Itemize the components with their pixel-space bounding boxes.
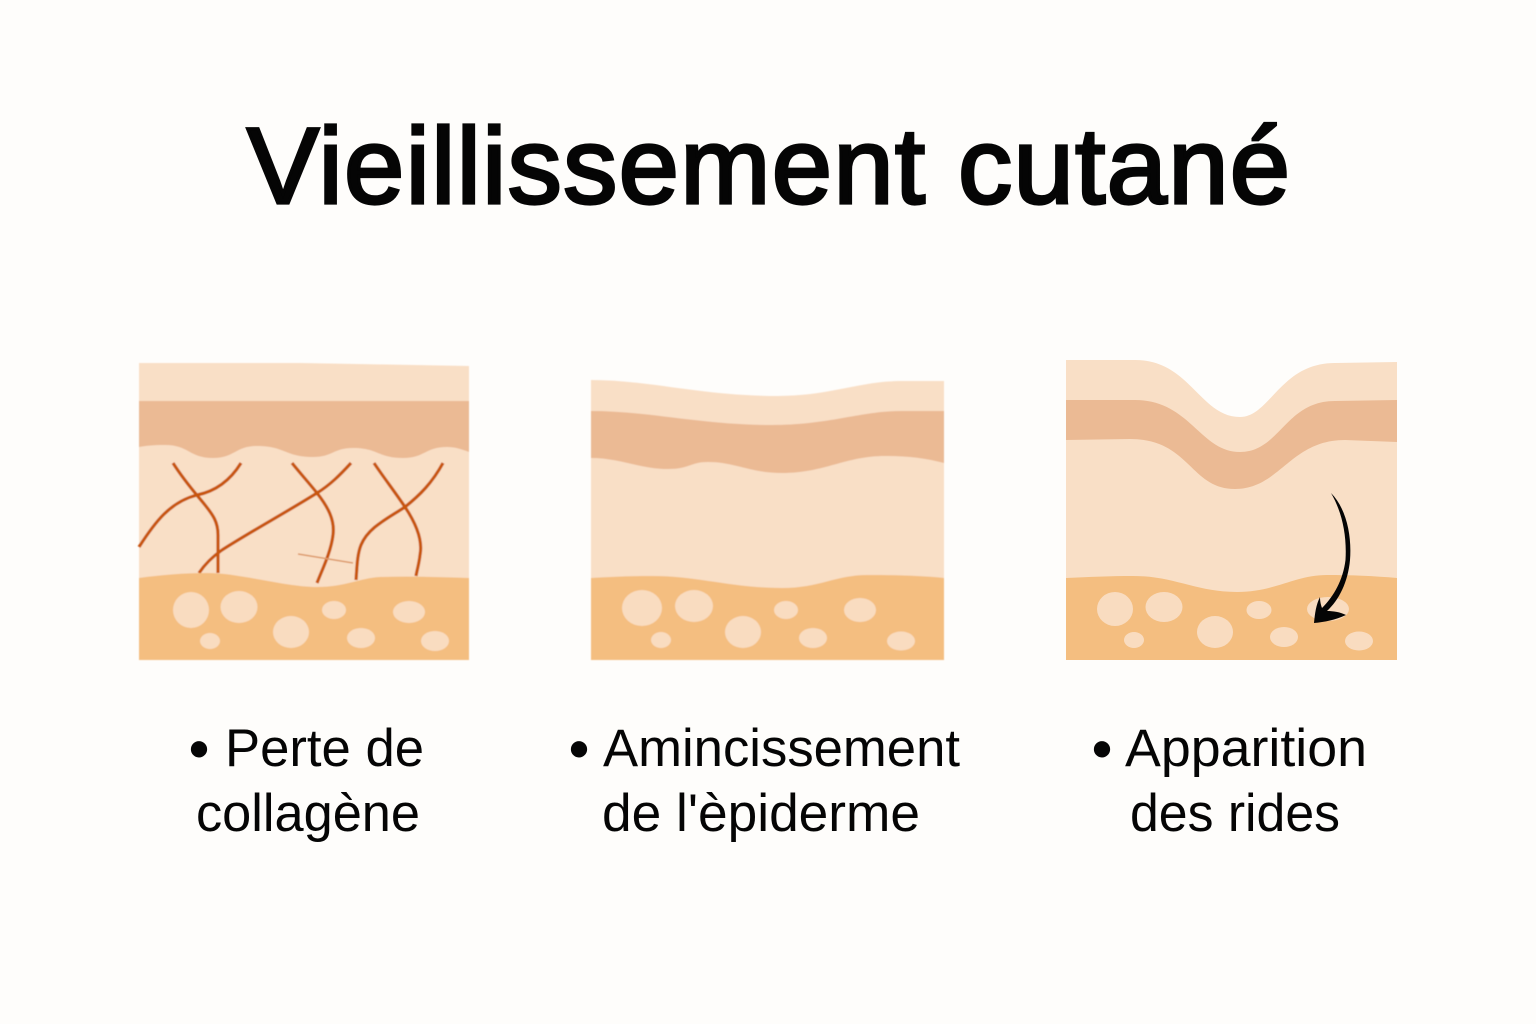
caption: amincissement de l'épiderme: Amincissement (603, 719, 960, 778)
fat cells (622, 590, 915, 650)
epidermis and dermis layer with wrinkle (1066, 360, 1397, 600)
fat cells (173, 591, 449, 651)
caption: apparition des rides: Apparition (1125, 719, 1367, 778)
darker band following wrinkle (1066, 400, 1397, 489)
panel: perte de collagène skin diagram (139, 363, 469, 660)
caption: perte de collagène: Perte de (225, 719, 424, 778)
caption: apparition des rides: des rides (1130, 784, 1340, 843)
icon: curved black arrow (1314, 493, 1350, 623)
caption: perte de collagène: collagène (196, 784, 420, 843)
fat cells (1097, 592, 1373, 650)
panel: apparition des rides skin diagram (1066, 360, 1397, 660)
panel: amincissement de l'épiderme skin diagram (591, 380, 944, 660)
caption: amincissement de l'épiderme (568, 716, 960, 843)
caption: apparition des rides (1092, 716, 1367, 843)
subcutaneous fat layer (1066, 575, 1397, 660)
caption: perte de collagène: • (188, 716, 210, 782)
epidermis and dermis layer (591, 380, 944, 600)
caption: amincissement de l'épiderme: de l'èpiderme (602, 784, 920, 843)
thinned darker band (591, 411, 944, 473)
collagen fibers (139, 463, 443, 583)
darker skin band (139, 401, 469, 458)
caption: amincissement de l'épiderme: • (568, 716, 590, 782)
title: Vieillissement cutané (247, 105, 1290, 226)
caption: apparition des rides: • (1092, 716, 1113, 782)
caption: perte de collagène (188, 716, 424, 843)
subcutaneous fat layer (591, 575, 944, 660)
epidermis and dermis layer (139, 363, 469, 600)
subcutaneous fat layer (139, 573, 469, 660)
